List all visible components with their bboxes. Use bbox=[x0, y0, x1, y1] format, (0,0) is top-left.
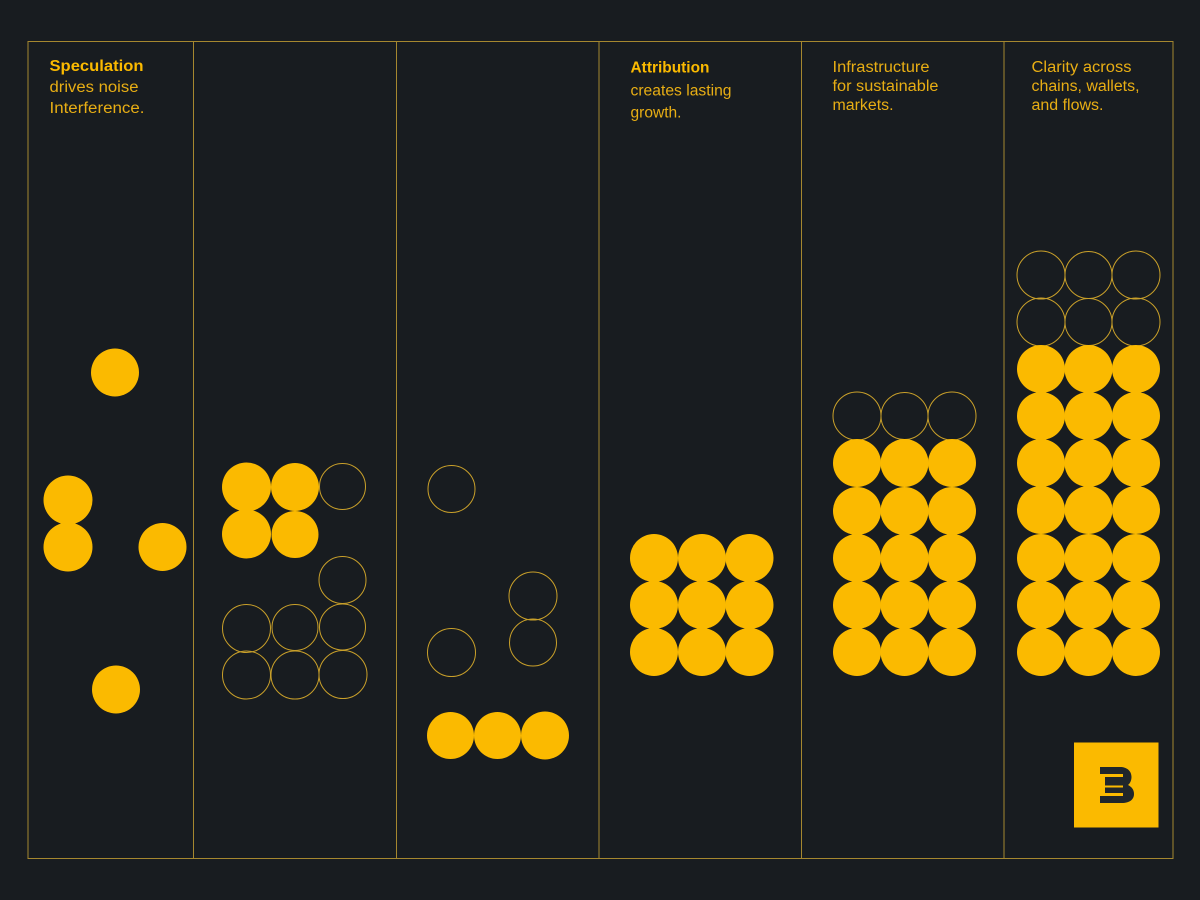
heading: clarity bbox=[1032, 59, 1140, 114]
filled dots bbox=[427, 712, 569, 760]
filled dot grid bbox=[630, 534, 774, 676]
scattered filled dots bbox=[44, 348, 186, 714]
filled dots bbox=[222, 462, 319, 558]
heading: speculation bbox=[50, 58, 144, 117]
heading: attribution: creates lasting bbox=[630, 82, 732, 100]
heading: clarity: chains, wallets, bbox=[1032, 78, 1140, 95]
filled dot grid bbox=[833, 439, 976, 676]
heading: attribution: Attribution bbox=[630, 60, 710, 76]
heading: infrastructure bbox=[832, 59, 938, 114]
heading: attribution: growth. bbox=[630, 104, 682, 122]
icon: logo bbox=[1074, 742, 1158, 828]
panel: column 5 infrastructure bbox=[832, 59, 976, 676]
panel: column 4 attribution bbox=[630, 60, 774, 676]
panel: column 3 dots bbox=[427, 466, 569, 760]
heading: infrastructure: markets. bbox=[832, 97, 894, 114]
heading: infrastructure: for sustainable bbox=[832, 78, 938, 95]
outlined dots bbox=[428, 466, 557, 676]
heading: clarity: and flows. bbox=[1032, 97, 1104, 114]
panel: column 6 clarity bbox=[1017, 59, 1160, 828]
outlined dots bbox=[222, 464, 367, 699]
heading: speculation: Interference. bbox=[50, 100, 144, 117]
filled dot grid bbox=[1017, 345, 1160, 676]
outlined dot row bbox=[833, 392, 976, 440]
heading: speculation: Speculation bbox=[50, 58, 144, 75]
heading: speculation: drives noise bbox=[50, 79, 138, 96]
panel: column 2 dots bbox=[222, 462, 367, 699]
heading: attribution bbox=[630, 60, 732, 122]
outlined dot rows bbox=[1017, 251, 1160, 346]
heading: infrastructure: Infrastructure bbox=[832, 59, 930, 76]
heading: clarity: Clarity across bbox=[1032, 59, 1132, 76]
panel: column 1 speculation bbox=[44, 58, 186, 714]
